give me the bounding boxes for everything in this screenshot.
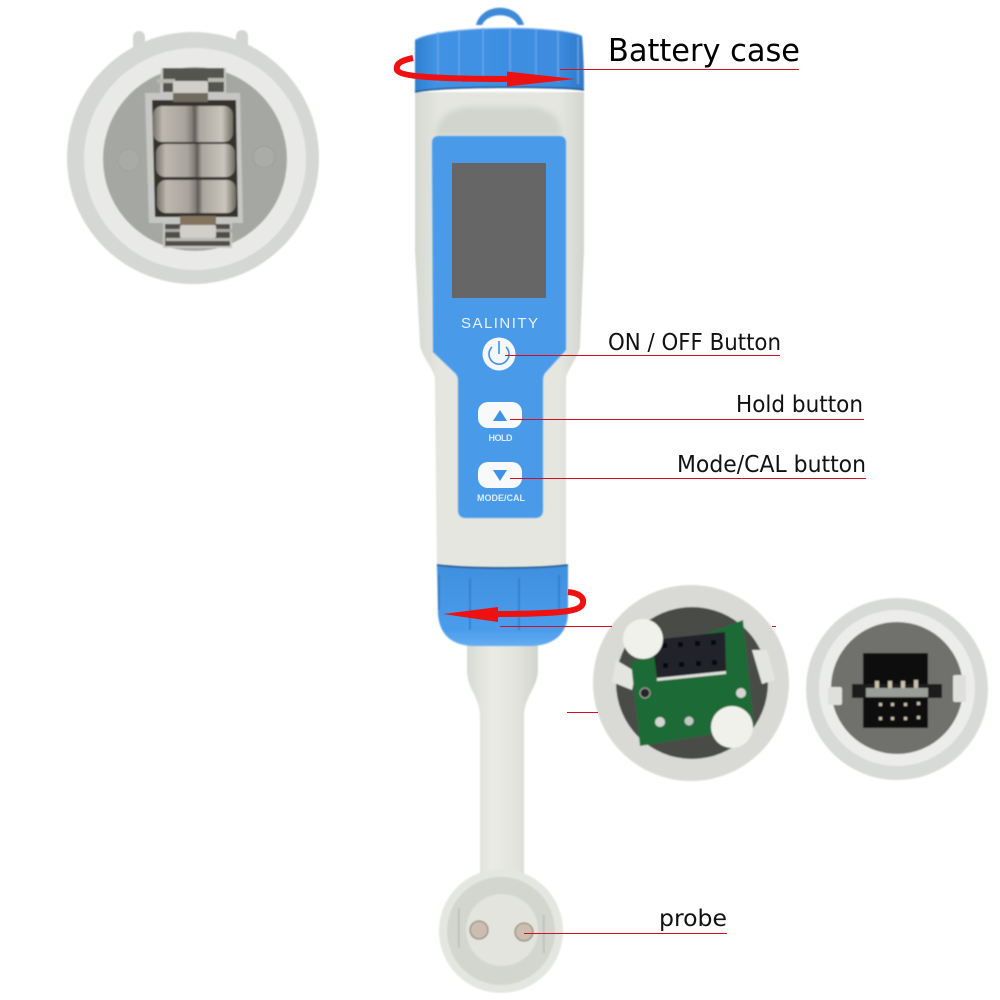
three coin cells <box>153 106 236 213</box>
lower blue cap <box>437 565 568 646</box>
battery holder <box>145 68 243 248</box>
SALINITY label: SALINITY <box>461 315 538 332</box>
cap loop <box>476 8 524 25</box>
blue front panel <box>432 136 566 518</box>
circuit board <box>631 620 754 746</box>
icon: hold button <box>478 402 522 428</box>
probe electrodes <box>470 921 488 939</box>
icon: mode button <box>478 462 522 488</box>
panel: battery compartment photo <box>67 30 319 284</box>
icon: power button <box>482 338 516 370</box>
LCD screen <box>452 163 546 298</box>
arrow: rotate lower cap <box>443 592 583 622</box>
callout: battery case: Battery case <box>608 33 800 69</box>
callout: on/off button: ON / OFF Button <box>608 330 781 356</box>
grey body <box>415 92 584 570</box>
glue blobs <box>623 619 663 659</box>
leader line: PCB module <box>567 712 598 713</box>
lower probe stem <box>467 640 538 885</box>
callout: hold button: Hold button <box>736 392 863 418</box>
battery cover outer ring <box>67 32 319 284</box>
leader line: lower cap <box>500 626 776 627</box>
HOLD label: HOLD <box>488 433 513 443</box>
panel: PCB module photo <box>593 585 789 781</box>
callout: mode/cal button: Mode/CAL button <box>677 452 866 478</box>
MODE/CAL label: MODE/CAL <box>477 493 525 503</box>
probe cup <box>439 869 563 993</box>
callout: probe: probe <box>659 906 727 932</box>
arrow: rotate top cap <box>397 58 575 86</box>
top blue cap <box>415 8 584 92</box>
connector socket <box>652 632 726 678</box>
panel: connector socket photo <box>806 598 988 780</box>
icon: battery cover tabs <box>133 30 248 51</box>
panel: salinity meter <box>415 8 584 993</box>
